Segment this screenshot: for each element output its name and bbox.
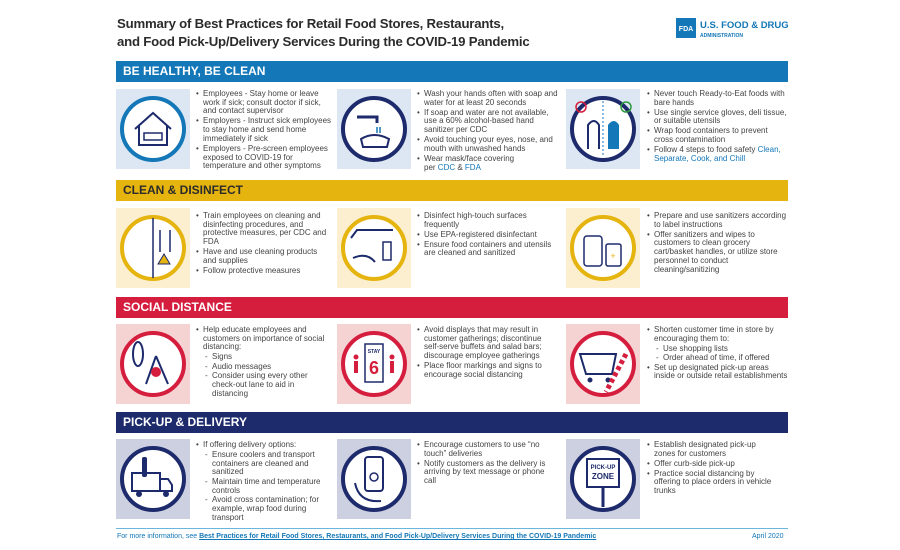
- header: clean & disinfect: [116, 180, 788, 201]
- footer text: For more information, see Best Practices for Retail Food Stores, Restaurants, and Food Pick-Up/Delivery Services During the COVID-19 Pandemic: [117, 533, 596, 540]
- text: wash hands: If soap and water are not available, use a 60% alcohol-based hand sanitizer per CDC: [424, 108, 549, 134]
- text: delivery options: If offering delivery options:: [203, 440, 296, 449]
- text: wash hands: per CDC & FDA: [424, 163, 481, 172]
- icon: gloves: [566, 89, 640, 169]
- text: sanitizers: Prepare and use sanitizers according to label instructions: [654, 211, 786, 229]
- text: educate: Consider using every other check-out lane to aid in distancing: [212, 371, 308, 398]
- text: ready-to-eat: Use single service gloves, deli tissue, or suitable utensils: [654, 108, 787, 125]
- text: employees: Employees - Stay home or leave work if sick; consult doctor if sick, and contact supervisor: [203, 89, 321, 115]
- text: delivery options: Maintain time and temperature controls: [212, 477, 320, 495]
- icon: stay 6 feet: STAY: [368, 349, 381, 355]
- icon: phone: [337, 439, 411, 519]
- text: delivery options: Ensure coolers and transport containers are cleaned and sanitized: [212, 450, 315, 476]
- icon: spray: [337, 208, 411, 288]
- text: no touch: Notify customers as the delivery is arriving by text message or phone call: [424, 459, 545, 485]
- text: employees: Employers - Instruct sick employees to stay home and send home immediately if sick: [203, 116, 331, 143]
- text: shorten time: Shorten customer time in store by encouraging them to:: [654, 325, 774, 343]
- text: avoid displays: Place floor markings and signs to encourage social distancing: [424, 361, 542, 379]
- icon: pick-up zone: ZONE: [592, 472, 615, 481]
- title: and Food Pick-Up/Delivery Services During the COVID-19 Pandemic: [117, 34, 529, 49]
- footer line: [116, 528, 788, 529]
- text: delivery options: [196, 440, 320, 522]
- text: disinfect: Use EPA-registered disinfectant: [424, 230, 537, 239]
- text: ready-to-eat: Never touch Ready-to-Eat foods with bare hands: [654, 89, 785, 107]
- icon: delivery truck: [116, 439, 190, 519]
- text: educate: [196, 325, 324, 398]
- logo: FDA: [676, 18, 788, 39]
- text: no touch: [417, 440, 546, 485]
- icon: stay 6 feet: [337, 324, 411, 404]
- text: sanitizers: Offer sanitizers and wipes to customers to clean grocery cart/basket handles, or utilize store personnel to conduct cleaning/sanitizing: [654, 230, 778, 274]
- header: pick-up & delivery: [116, 412, 788, 433]
- text: pick-up zones: Practice social distancing by offering to place orders in vehicle trunks: [654, 469, 771, 495]
- text: educate: Signs: [212, 352, 232, 361]
- text: wash hands: Wash your hands often with soap and water for at least 20 seconds: [424, 89, 558, 107]
- date: April 2020: [752, 533, 784, 540]
- text: shorten time: Order ahead of time, if offered: [663, 353, 770, 362]
- text: disinfect: [417, 211, 551, 257]
- icon: cart: [566, 324, 640, 404]
- icon: handwash: [337, 89, 411, 169]
- text: avoid displays: Avoid displays that may result in customer gatherings; discontinue self-serve buffets and salad bars; discourage employee gatherings: [424, 325, 542, 360]
- text: pick-up zones: [647, 440, 771, 495]
- icon: cleaning tools: [116, 208, 190, 288]
- icon: pick-up zone: [566, 439, 640, 519]
- text: ready-to-eat: Wrap food containers to prevent cross contamination: [654, 126, 768, 144]
- text: wash hands: [417, 89, 558, 172]
- icon: house: [116, 89, 190, 169]
- text: disinfect: Disinfect high-touch surfaces frequently: [424, 211, 527, 229]
- text: train employees: Train employees on cleaning and disinfecting procedures, and protective measures, per CDC and FDA: [203, 211, 326, 246]
- header: clean & disinfect: CLEAN & DISINFECT: [123, 183, 243, 197]
- logo: FDA: FDA: [679, 26, 693, 33]
- logo: FDA: ADMINISTRATION: [700, 33, 743, 39]
- icon: sanitizers: +: [610, 251, 616, 261]
- text: sanitizers: [647, 211, 786, 274]
- text: ready-to-eat: [647, 89, 787, 163]
- text: avoid displays: [417, 325, 542, 379]
- text: educate: Audio messages: [212, 362, 271, 371]
- title: [117, 16, 530, 49]
- header: pick-up & delivery: PICK-UP & DELIVERY: [123, 415, 247, 429]
- text: train employees: [196, 211, 326, 275]
- title: Summary of Best Practices for Retail Food Stores, Restaurants,: [117, 16, 504, 31]
- text: shorten time: Set up designated pick-up areas inside or outside retail establishments: [654, 363, 787, 380]
- header: social distance: SOCIAL DISTANCE: [123, 300, 232, 314]
- icon: sanitizers: [566, 208, 640, 288]
- logo: FDA: U.S. FOOD & DRUG: [700, 20, 788, 31]
- text: wash hands: Avoid touching your eyes, nose, and mouth with unwashed hands: [424, 135, 553, 153]
- text: no touch: Encourage customers to use “no touch” deliveries: [424, 440, 540, 458]
- icon: stay 6 feet: 6: [369, 358, 379, 378]
- text: shorten time: [647, 325, 788, 380]
- header: social distance: [116, 297, 788, 318]
- header: be healthy: BE HEALTHY, BE CLEAN: [123, 64, 265, 78]
- text: shorten time: Use shopping lists: [663, 344, 728, 353]
- icon: pick-up zone: PICK-UP: [591, 465, 615, 471]
- header: be healthy: [116, 61, 788, 82]
- text: educate: Help educate employees and customers on importance of social distancing:: [203, 325, 324, 351]
- text: employees: [196, 89, 331, 170]
- text: pick-up zones: Offer curb-side pick-up: [654, 459, 735, 468]
- text: employees: Employers - Pre-screen employees exposed to COVID-19 for temperature and other symptoms: [203, 144, 328, 170]
- icon: sign: [116, 324, 190, 404]
- text: train employees: Have and use cleaning products and supplies: [203, 247, 317, 265]
- text: disinfect: Ensure food containers and utensils are cleaned and sanitized: [424, 240, 551, 257]
- text: wash hands: Wear mask/face covering: [424, 154, 514, 163]
- text: ready-to-eat: Follow 4 steps to food safety Clean, Separate, Cook, and Chill: [654, 145, 781, 163]
- text: delivery options: Avoid cross contamination; for example, wrap food during transport: [212, 495, 319, 522]
- text: pick-up zones: Establish designated pick-up zones for customers: [654, 440, 756, 458]
- text: train employees: Follow protective measures: [203, 266, 300, 275]
